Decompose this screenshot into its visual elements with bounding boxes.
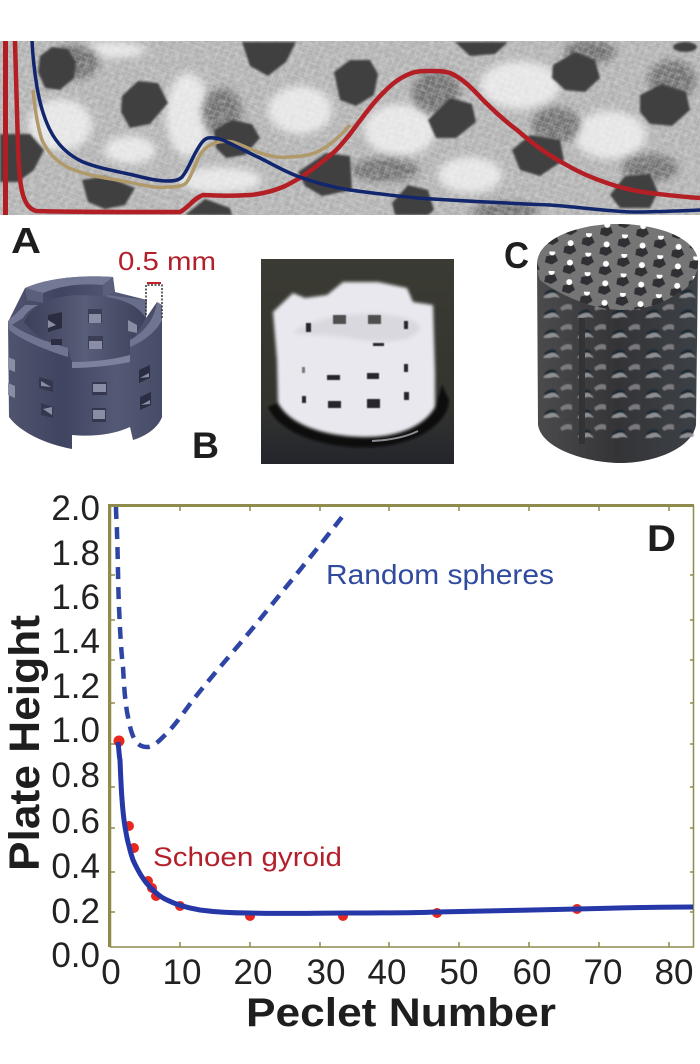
- white column body: [273, 282, 435, 437]
- panel: gyroid column model C: [537, 224, 698, 463]
- black holder ring: [268, 385, 449, 447]
- surface texture: [0, 41, 700, 215]
- lattice grid: [0, 41, 700, 215]
- front left rim: [8, 322, 68, 357]
- x axis tick labels: 20: [234, 953, 272, 992]
- y axis tick labels: 0.2: [51, 892, 100, 931]
- outer windows: [8, 357, 151, 422]
- top face: [537, 224, 698, 310]
- raised back rim top face: [25, 276, 113, 293]
- central seam: [579, 318, 585, 444]
- y axis tick labels: 1.8: [51, 534, 100, 573]
- inner wall shading: [293, 314, 420, 341]
- raised back rim inner face: [25, 288, 43, 303]
- schoen gyroid data points: [114, 736, 582, 921]
- inner wall: [24, 295, 146, 362]
- red trace: vertical spike: [3, 41, 8, 215]
- x axis tick labels: 30: [307, 953, 345, 992]
- x axis tick labels: 40: [368, 953, 406, 992]
- x axis tick labels: 50: [440, 953, 478, 992]
- y axis tick labels: 2.0: [51, 489, 100, 528]
- panel: SEM micrograph with chromatogram traces: [0, 40, 700, 220]
- silhouette: [8, 276, 162, 449]
- plot frame: [110, 506, 694, 947]
- panel label B: B: [192, 425, 219, 466]
- side lattice: [540, 280, 696, 443]
- shaded cavity halos: [51, 40, 696, 220]
- x axis tick labels: 10: [163, 953, 201, 992]
- y axis tick labels: 1.2: [51, 667, 100, 706]
- panel label D: D: [647, 518, 676, 559]
- schoen gyroid fitted curve: [118, 742, 693, 913]
- panel: CAD model of column A: [8, 276, 162, 449]
- right back rim: [107, 295, 147, 317]
- x axis tick labels: 70: [584, 953, 622, 992]
- front rim: [72, 355, 130, 368]
- y axis tick labels: 1.4: [51, 622, 100, 661]
- dimension label 0.5 mm: 0.5 mm: [118, 246, 216, 276]
- panel: chart D plate height vs Peclet number: [1, 489, 694, 1035]
- schoen gyroid label: Schoen gyroid: [153, 842, 342, 872]
- column windows: [302, 315, 409, 408]
- panel label C: C: [504, 235, 529, 276]
- red trace: second peak: [15, 41, 700, 212]
- left rim: [8, 305, 38, 326]
- x axis title: Peclet Number: [246, 991, 556, 1035]
- panel label A: A: [11, 220, 41, 261]
- x axis tick labels: 80: [655, 953, 693, 992]
- cylinder body: [537, 262, 698, 463]
- random spheres label: Random spheres: [326, 559, 554, 590]
- y axis tick labels: 0.6: [51, 802, 100, 841]
- raised back rim right step: [103, 277, 115, 297]
- y axis tick labels: 0.4: [51, 847, 100, 886]
- dimension bracket: [146, 283, 162, 318]
- blue trace: [32, 41, 700, 212]
- tan trace: [33, 90, 350, 187]
- y axis tick labels: 1.0: [51, 711, 100, 750]
- x axis tick labels: 60: [513, 953, 551, 992]
- y axis tick labels: 0.8: [51, 756, 100, 795]
- panel: photo of printed column B: [261, 259, 454, 464]
- inner windows: [48, 309, 137, 349]
- y axis title: Plate Height: [1, 615, 49, 871]
- x axis tick labels: 0: [101, 953, 121, 992]
- ring highlight: [372, 431, 418, 441]
- y axis tick labels: 0.0: [51, 936, 100, 975]
- right rim: [130, 302, 162, 347]
- random spheres dashed curve: [116, 507, 342, 747]
- light lattice ridges: [28, 42, 646, 193]
- x axis tick labels: [101, 953, 693, 992]
- y axis tick labels: [51, 489, 100, 975]
- pore holes: [0, 42, 697, 215]
- y axis tick labels: 1.6: [51, 578, 100, 617]
